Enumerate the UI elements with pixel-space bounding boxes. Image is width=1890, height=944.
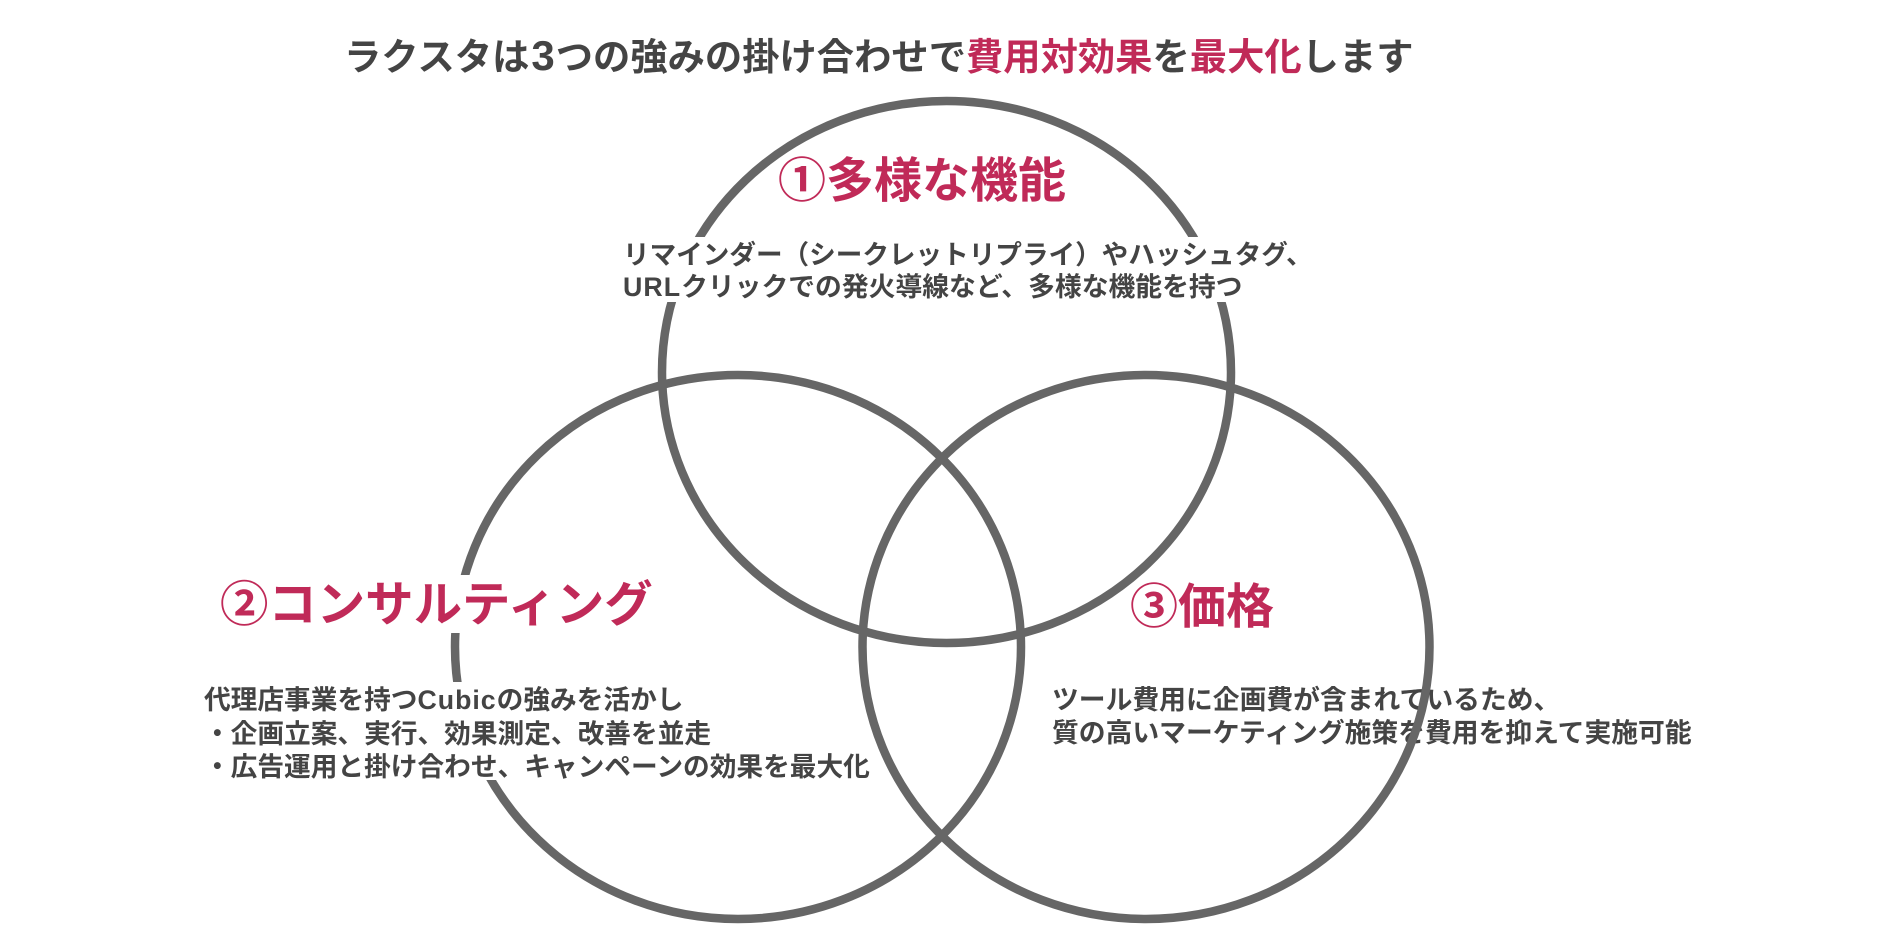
panel: consulting heading: ②コンサルティング <box>220 578 653 632</box>
circle: multi-function <box>662 101 1231 643</box>
panel: multi-function description: URLクリックでの発火導線など、多様な機能を持つ <box>623 272 1242 302</box>
panel: consulting description <box>202 682 870 782</box>
text block: price description: 質の高いマーケティング施策を費用を抑えて実施可能 <box>1052 717 1692 748</box>
panel: consulting description: ・広告運用と掛け合わせ、キャンペーンの効果を最大化 <box>204 752 870 782</box>
text block: price description: ツール費用に企画費が含まれているため、 <box>1052 684 1560 715</box>
panel: multi-function description: リマインダー（シークレットリプライ）やハッシュタグ、 <box>623 240 1313 270</box>
text block: price description <box>1052 684 1692 748</box>
panel: consulting description: ・企画立案、実行、効果測定、改善を並走 <box>204 719 711 749</box>
panel: price heading: ③価格 <box>1130 581 1274 634</box>
panel: consulting description: 代理店事業を持つCubicの強みを活かし <box>204 685 683 715</box>
circle: price <box>862 375 1430 919</box>
venn diagram: three overlapping circles <box>455 101 1430 919</box>
title: ラクスタは3つの強みの掛け合わせで費用対効果を最大化します <box>344 32 1414 79</box>
circle: consulting <box>455 375 1021 919</box>
panel: multi-function heading: ①多様な機能 <box>778 155 1066 208</box>
panel: multi-function description <box>620 237 1313 302</box>
